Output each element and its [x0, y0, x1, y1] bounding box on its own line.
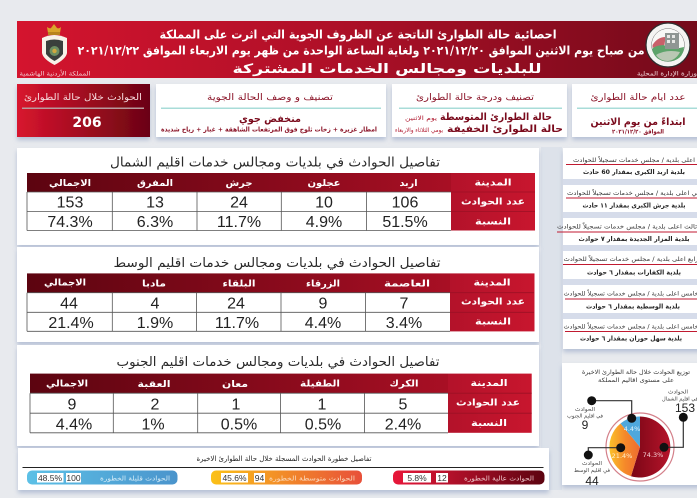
central table	[27, 273, 534, 332]
central table: 21.4%	[48, 315, 94, 332]
medium severity pill: 45.6%	[222, 473, 247, 483]
level line 2: حالة الطوارئ الخفيفة	[447, 124, 563, 135]
low severity pill	[27, 470, 178, 484]
north table: 24	[230, 194, 248, 212]
panel: regional pie chart: على مستوى اقاليم المملكة	[598, 377, 674, 384]
panel: north region table	[17, 148, 539, 245]
callout: central: في اقليم الوسط	[574, 468, 610, 474]
days heading: عدد ايام حالة الطوارئ	[590, 93, 686, 103]
central table: 4.4%	[305, 315, 341, 332]
central table: البلقاء	[222, 278, 256, 290]
pie heading: توزيع الحوادث خلال حالة الطوارئ الاخيرة	[582, 369, 690, 376]
central table: 1.9%	[137, 315, 173, 332]
panel: regional pie chart	[562, 363, 697, 488]
north table	[27, 173, 535, 231]
days start: ابتداءً من يوم الاثنين	[590, 116, 686, 128]
top municipality 5: بلدية الوسطية بمقدار ٦ حوادث	[586, 302, 680, 310]
callout: central	[574, 443, 625, 488]
severity heading: تفاصيل خطورة الحوادث المسجلة خلال حالة الطوارئ الاخيرة	[196, 455, 372, 463]
central table: الزرقاء	[306, 278, 340, 290]
panel: incidents total	[17, 84, 150, 137]
top municipality 4: بلدية الكفارات بمقدار ٦ حوادث	[587, 268, 681, 276]
ministry caption: وزارة الإدارة المحلية	[637, 70, 697, 78]
high severity pill: 12	[437, 473, 447, 483]
callout: south: الحوادث	[575, 407, 595, 413]
top municipality 5: خامس اعلى بلدية / مجلس خدمات تسجيلاً للحوادث	[564, 290, 697, 298]
north heading: تفاصيل الحوادث في بلديات ومجالس خدمات اقليم الشمال	[110, 156, 440, 170]
header title line 3: للبلديات ومجالس الخدمات المشتركة	[232, 62, 542, 77]
icon: coat of arms	[42, 24, 67, 65]
callout: south: في اقليم الجنوب	[567, 414, 603, 420]
pie chart: 74.3%	[643, 451, 663, 459]
header title line 1: احصائية حالة الطوارئ الناتجة عن الظروف الجوية التي اثرت على المملكة	[160, 28, 556, 42]
central table: مادبا	[142, 278, 166, 290]
south table: 1	[318, 396, 327, 414]
central table: النسبة	[475, 316, 511, 328]
north table: 74.3%	[47, 214, 93, 231]
header title line 2: من صباح يوم الاثنين الموافق ٢٠٢١/١٢/٢٠ ولغاية الساعة الواحدة من ظهر يوم الاربعاء الموافق ٢٠٢١/١٢/٢٢	[78, 44, 644, 58]
incidents total value: 206	[72, 115, 102, 131]
panel: emergency days	[572, 84, 697, 137]
high severity pill: الحوادث عالية الخطورة	[464, 474, 534, 482]
north table: 153	[57, 194, 83, 212]
south table: 2	[151, 396, 160, 414]
panel: south region table	[17, 345, 539, 446]
panel: top municipalities	[557, 148, 697, 349]
pie chart: 4.4%	[624, 425, 640, 433]
top municipality 3: ثالث اعلى بلدية / مجلس خدمات تسجيلاً للحوادث	[557, 223, 697, 230]
central table: الاجمالي	[44, 278, 86, 288]
south table: 1%	[141, 416, 165, 434]
central table: 11.7%	[215, 315, 259, 332]
top municipality 4	[563, 255, 697, 276]
central heading: تفاصيل الحوادث في بلديات ومجالس خدمات اقليم الوسط	[114, 256, 441, 271]
south table: المدينة	[470, 378, 508, 389]
weather type: منخفض جوي	[239, 114, 301, 125]
top municipality 1	[566, 156, 697, 176]
callout: central: 44	[585, 474, 599, 488]
south table: معان	[222, 379, 248, 390]
central table: 4	[151, 296, 160, 312]
south table: الكرك	[390, 378, 418, 390]
north table: المفرق	[137, 178, 173, 189]
north table: عدد الحوادث	[461, 196, 525, 208]
low severity pill: 100	[66, 473, 81, 483]
callout: central: الحوادث	[582, 461, 602, 467]
north table: 6.3%	[137, 214, 173, 231]
incidents heading: الحوادث خلال حالة الطوارئ	[24, 93, 142, 103]
top municipality 4: رابع اعلى بلدية / مجلس خدمات تسجيلاً للحوادث	[564, 255, 697, 263]
high severity pill: 5.8%	[407, 473, 427, 483]
north table: جرش	[226, 178, 252, 189]
south table: 0.5%	[221, 416, 257, 434]
medium severity pill	[211, 470, 362, 484]
south table: 9	[68, 396, 77, 414]
south table	[30, 374, 532, 434]
north table: النسبة	[475, 216, 511, 228]
north table: 11.7%	[217, 214, 261, 231]
header banner	[17, 21, 697, 78]
north table: 106	[392, 194, 418, 212]
north table: 4.9%	[306, 214, 342, 231]
top municipality 1: اعلى بلدية / مجلس خدمات تسجيلاً للحوادث	[573, 156, 695, 164]
top municipality 2	[566, 189, 697, 210]
north table: 13	[146, 194, 164, 212]
top municipality 1: بلدية اربد الكبرى بمقدار 60 حادث	[583, 168, 685, 176]
central table: عدد الحوادث	[461, 296, 525, 308]
level heading: تصنيف ودرجة حالة الطوارئ	[416, 93, 535, 103]
south table: 0.5%	[305, 416, 341, 434]
south table: النسبة	[471, 418, 507, 429]
south table: 4.4%	[56, 416, 92, 434]
callout: south	[567, 396, 636, 432]
level line 2: يومي الثلاثاء والاربعاء	[395, 127, 443, 134]
level line 1: حالة الطوارئ المتوسطة	[440, 112, 552, 123]
central table: العاصمة	[384, 278, 430, 290]
top municipality 6: خامس اعلى بلدية / مجلس خدمات تسجيلاً للحوادث	[564, 323, 697, 330]
south table: الطفيلة	[300, 378, 340, 390]
north table: عجلون	[308, 178, 340, 189]
top municipality 2: ثاني اعلى بلدية / مجلس خدمات تسجيلاً للحوادث	[567, 189, 697, 197]
north table: 10	[315, 194, 333, 212]
callout: north: 153	[675, 401, 695, 415]
top municipality 3	[557, 223, 697, 243]
top municipality 2: بلدية جرش الكبرى بمقدار ١١ حادث	[582, 202, 686, 210]
weather heading: تصنيف و وصف الحالة الجوية	[207, 93, 334, 103]
pie chart	[606, 413, 674, 481]
top municipality 3: بلدية المزار الجديدة بمقدار ٧ حوادث	[578, 235, 690, 243]
central table: 3.4%	[386, 315, 422, 332]
central table: 9	[319, 296, 328, 312]
south table: 2.4%	[385, 416, 421, 434]
central table: المدينة	[474, 278, 510, 288]
weather description: امطار غزيرة + زخات ثلوج فوق المرتفعات الشاهقة + غبار + رياح شديدة	[161, 126, 377, 134]
central table: 7	[400, 296, 409, 312]
panel: weather classification	[156, 84, 386, 137]
callout: south: 9	[582, 418, 589, 432]
north table: المدينة	[474, 178, 512, 188]
days date: الموافق ٢٠٢١/١٢/٢٠	[612, 128, 664, 136]
kingdom caption: المملكة الأردنية الهاشمية	[20, 70, 91, 78]
icon: ministry logo	[646, 23, 690, 67]
south table: 1	[232, 396, 241, 414]
south table: 5	[399, 396, 408, 414]
low severity pill: 48.5%	[38, 473, 62, 483]
medium severity pill: 94	[255, 473, 264, 483]
panel: central region table	[17, 247, 539, 342]
top municipality 6: بلدية سهل حوران بمقدار ٦ حوادث	[580, 334, 682, 342]
south heading: تفاصيل الحوادث في بلديات ومجالس خدمات اقليم الجنوب	[116, 355, 440, 370]
high severity pill	[393, 470, 544, 484]
callout: north: الحوادث	[668, 390, 688, 396]
level line 2	[395, 124, 563, 135]
top municipality 5	[564, 290, 697, 310]
south table: العقبة	[138, 379, 170, 390]
top municipality 6	[564, 323, 697, 342]
pie chart: 21.4%	[612, 452, 632, 460]
central table: 44	[60, 296, 78, 312]
panel: emergency level	[392, 84, 567, 137]
callout: north	[660, 390, 697, 452]
central table: 24	[227, 296, 245, 312]
south table: عدد الحوادث	[456, 398, 520, 408]
medium severity pill: الحوادث متوسطة الخطورة	[269, 474, 355, 482]
level line 1: يوم الاثنين	[405, 115, 437, 122]
north table: 51.5%	[382, 214, 428, 231]
north table: اربد	[400, 178, 418, 189]
north table: الاجمالي	[49, 178, 91, 189]
low severity pill: الحوادث قليلة الخطورة	[100, 474, 170, 482]
south table: الاجمالي	[46, 378, 88, 390]
panel: severity summary	[18, 448, 549, 490]
